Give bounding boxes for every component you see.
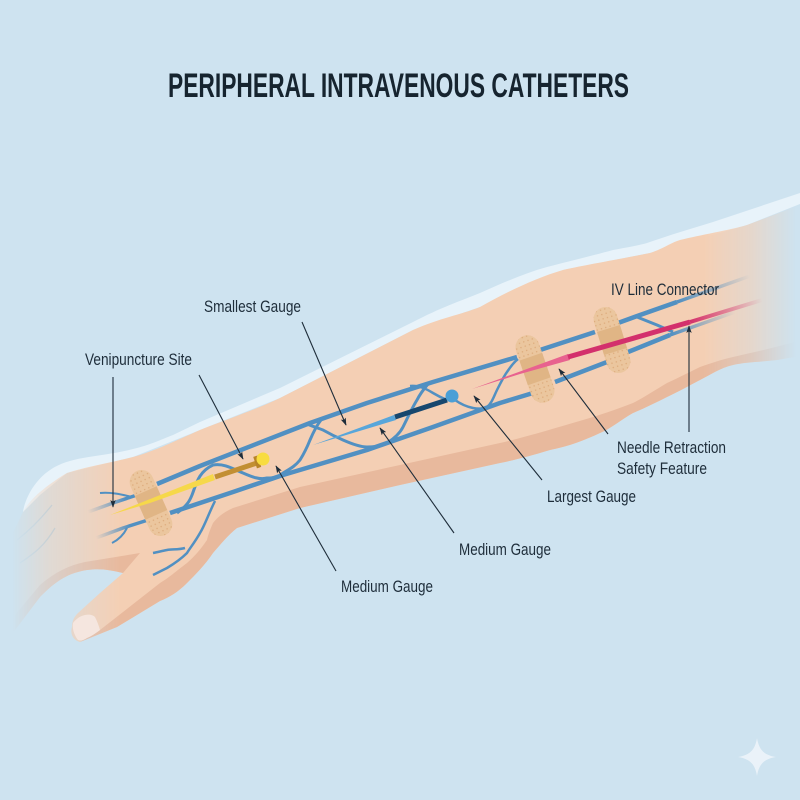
faint finger lines [26,504,56,560]
arrow: largest gauge [474,396,542,480]
shaded web of hand [36,553,140,602]
cross veins [177,420,321,513]
shaded underside of arm and thumb [80,341,800,642]
label: smallest gauge: Smallest Gauge [204,297,301,316]
thumbnail [73,615,100,640]
skin base [0,205,800,642]
label: IV line connector: IV Line Connector [611,280,719,299]
arrow: venipuncture site vertical [112,377,114,507]
arrow: IV line connector [688,326,690,432]
arrow: venipuncture site diagonal [199,375,243,459]
arrow: medium gauge blue [380,428,454,533]
label: venipuncture site: Venipuncture Site [85,350,192,369]
label: medium gauge left: Medium Gauge [341,577,433,596]
upper main vein [157,357,517,484]
arrow: smallest gauge [302,322,346,425]
arrow: needle retraction [559,369,608,434]
label: needle retraction safety feature: Needle Retraction [617,438,726,457]
blue catheter [313,390,458,445]
pink catheter [472,300,762,389]
bandage: wrist [126,466,176,540]
thumb vein branch [153,501,215,575]
veins [88,276,750,575]
yellow catheter [110,452,270,515]
label: needle retraction safety feature: Safety Feature [617,459,707,478]
label: medium gauge right: Medium Gauge [459,540,551,559]
wrist vein tributaries [88,495,137,512]
arrow: medium gauge yellow [276,466,336,571]
label: largest gauge: Largest Gauge [547,487,636,506]
label: needle retraction safety feature [617,438,726,478]
arm highlight [23,193,800,512]
bandage: upper forearm [591,304,633,376]
bandage: mid forearm [512,332,558,406]
icon: sparkle [738,738,776,776]
arm and hand [0,205,800,642]
lower main vein [170,393,533,513]
